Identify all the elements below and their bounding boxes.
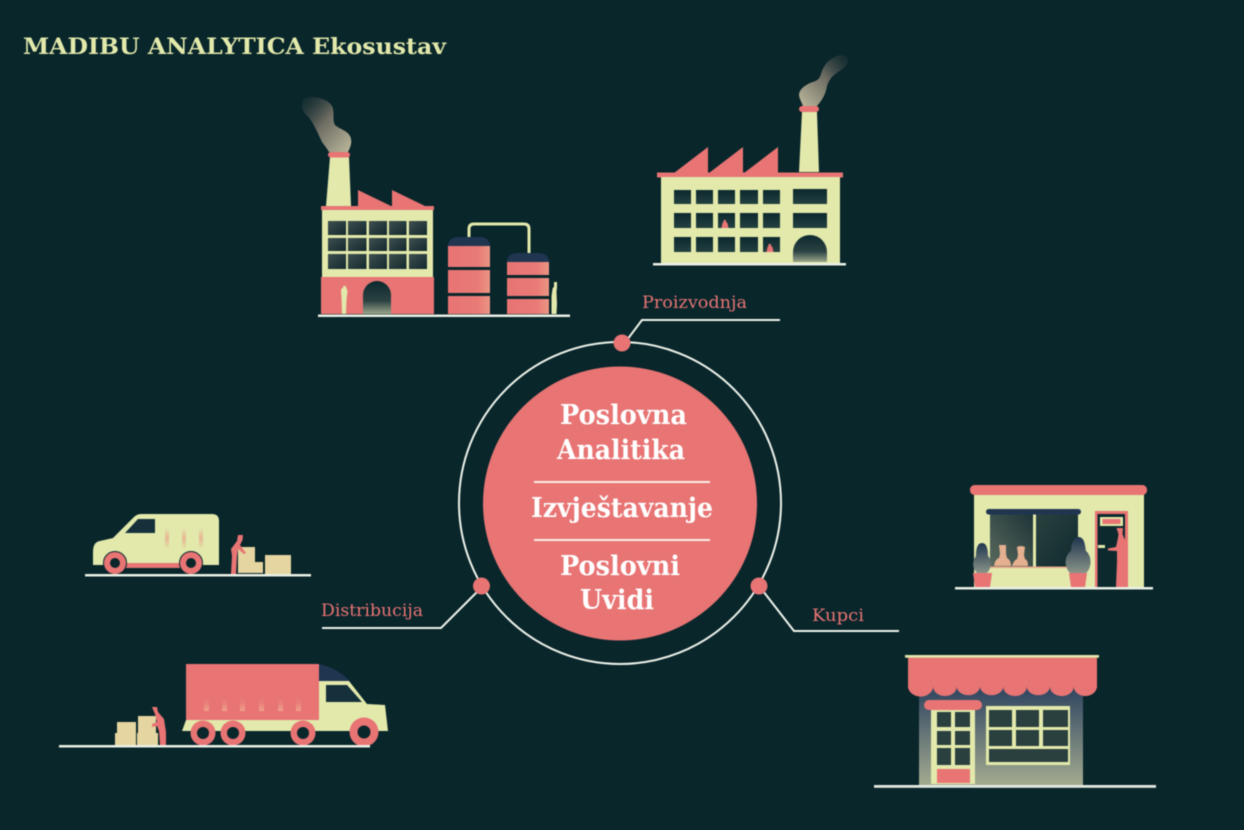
windows — [674, 189, 827, 252]
central disc — [483, 366, 757, 640]
tank 2 — [507, 253, 549, 262]
customers — [994, 545, 1011, 566]
wall — [974, 493, 1144, 587]
worker — [152, 707, 166, 745]
sawtooth roof — [674, 147, 778, 173]
ground — [653, 263, 846, 266]
ground — [85, 574, 311, 576]
tank 1 — [448, 237, 490, 246]
arched door — [793, 235, 827, 262]
van stripes — [165, 528, 169, 548]
bottles — [1098, 545, 1105, 548]
central diagram: Uvidi — [580, 585, 654, 616]
ground — [874, 785, 1156, 788]
node dots — [614, 334, 630, 352]
factory with tanks — [302, 97, 570, 317]
factory right — [653, 55, 848, 266]
shop window — [986, 706, 1070, 765]
cargo box — [186, 664, 319, 720]
ring — [459, 342, 781, 664]
chimney — [326, 157, 351, 206]
left plant — [973, 543, 991, 573]
van with worker — [85, 514, 311, 576]
label: Kupci: Kupci — [812, 606, 864, 625]
storefront — [874, 655, 1156, 788]
sign — [1100, 517, 1123, 526]
label: Proizvodnja: Proizvodnja — [642, 293, 747, 312]
ground — [955, 587, 1153, 590]
right plant — [1066, 537, 1090, 573]
central diagram — [322, 320, 899, 664]
person — [552, 282, 557, 314]
building — [661, 177, 840, 263]
connector lines — [627, 320, 780, 340]
ground — [59, 745, 370, 748]
boxes — [238, 547, 263, 573]
cargo stripes — [204, 695, 209, 711]
wall — [919, 688, 1083, 785]
van window — [125, 519, 155, 533]
worker — [231, 535, 246, 574]
cab roof — [319, 664, 350, 681]
awning — [908, 657, 1097, 697]
central diagram: Analitika — [556, 435, 685, 466]
arched door — [363, 281, 391, 314]
central diagram: Poslovni — [560, 551, 680, 582]
sawtooth roof — [358, 190, 425, 206]
door — [1095, 511, 1128, 587]
clerk — [1108, 528, 1125, 587]
pipe — [469, 224, 529, 254]
van body — [93, 514, 219, 565]
door sign — [924, 700, 982, 710]
boxes — [115, 733, 136, 745]
building — [322, 210, 433, 277]
counter — [990, 566, 1078, 568]
window — [990, 513, 1033, 567]
wheels — [104, 552, 126, 574]
chimney — [799, 112, 819, 172]
roof — [970, 485, 1147, 495]
cab and chassis — [182, 681, 388, 731]
awning — [986, 509, 1081, 514]
kiosk shop — [955, 485, 1153, 590]
center texts: Poslovna — [560, 400, 687, 431]
people in windows — [722, 220, 728, 228]
title: MADIBU ANALYTICA Ekosustav — [23, 34, 447, 60]
door — [931, 710, 975, 784]
label: Distribucija: Distribucija — [321, 601, 423, 620]
central diagram: Izvještavanje — [531, 493, 713, 524]
smoke — [799, 55, 848, 106]
sill — [115, 563, 191, 568]
cab window — [326, 685, 362, 702]
truck with worker — [59, 664, 388, 748]
person — [341, 286, 348, 314]
ground — [318, 314, 570, 317]
smoke — [302, 97, 351, 152]
wheels — [190, 720, 216, 746]
windows — [328, 221, 427, 269]
